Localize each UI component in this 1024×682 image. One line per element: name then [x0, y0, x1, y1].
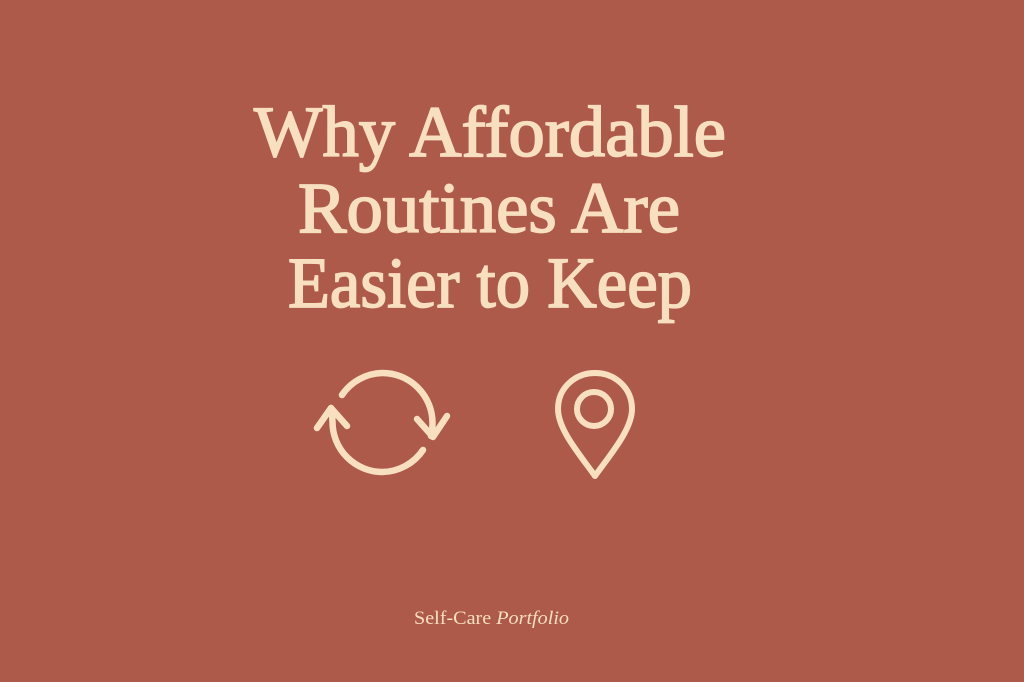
footer label: Self-Care Portfolio: [414, 608, 569, 629]
icon: location pin: [558, 373, 632, 476]
title: Why Affordable: [254, 92, 726, 172]
title: [254, 92, 726, 323]
icon: refresh arrows: [317, 373, 447, 472]
title: Easier to Keep: [288, 243, 692, 323]
title: Routines Are: [298, 168, 680, 248]
